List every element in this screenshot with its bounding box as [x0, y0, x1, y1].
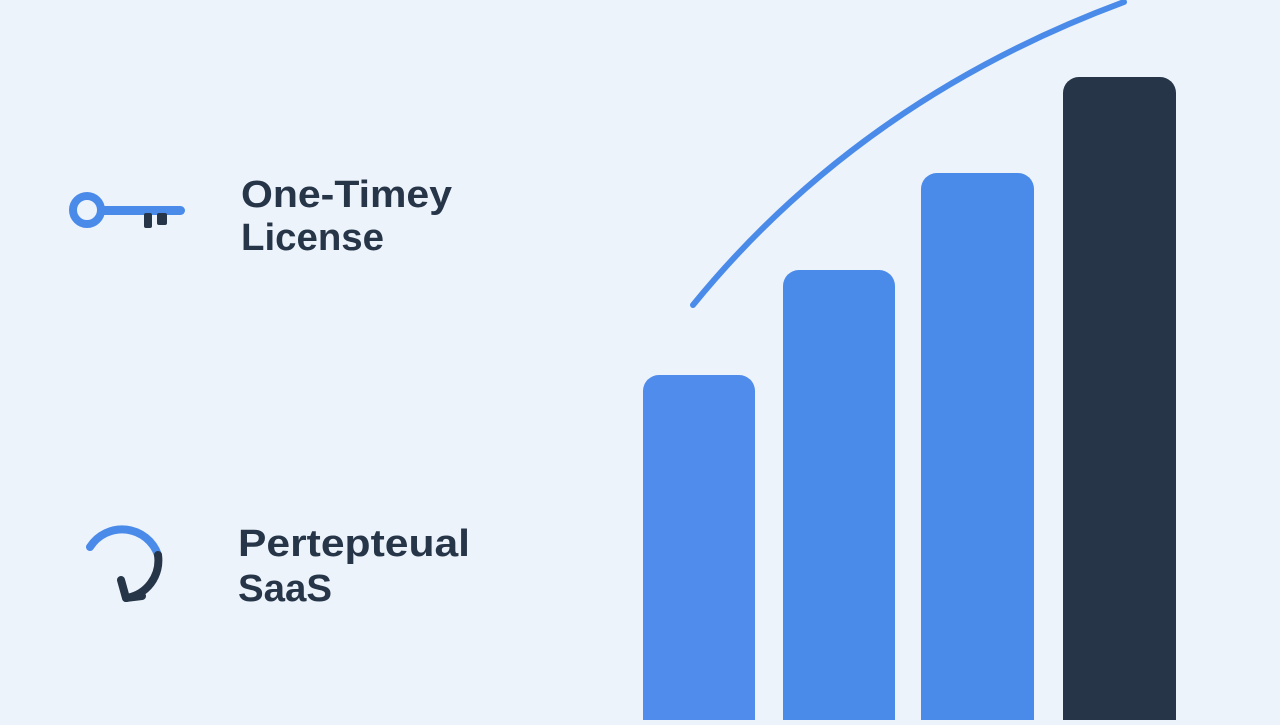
text: Pertepteual SaaS: Pertepteual [238, 523, 470, 565]
bar 4 [1063, 77, 1176, 725]
text: One-Timey License: One-Timey [241, 174, 452, 216]
bar 2 [783, 270, 895, 725]
bar 1 [643, 375, 755, 725]
text: Pertepteual SaaS [238, 523, 470, 610]
bar 3 [921, 173, 1034, 725]
text: One-Timey License: License [241, 217, 384, 259]
icon: key [73, 196, 185, 228]
text: One-Timey License [241, 174, 452, 259]
icon: circular arrow [90, 529, 158, 598]
trend curve [693, 2, 1124, 305]
bar chart [643, 77, 1176, 725]
text: Pertepteual SaaS: SaaS [238, 568, 332, 610]
